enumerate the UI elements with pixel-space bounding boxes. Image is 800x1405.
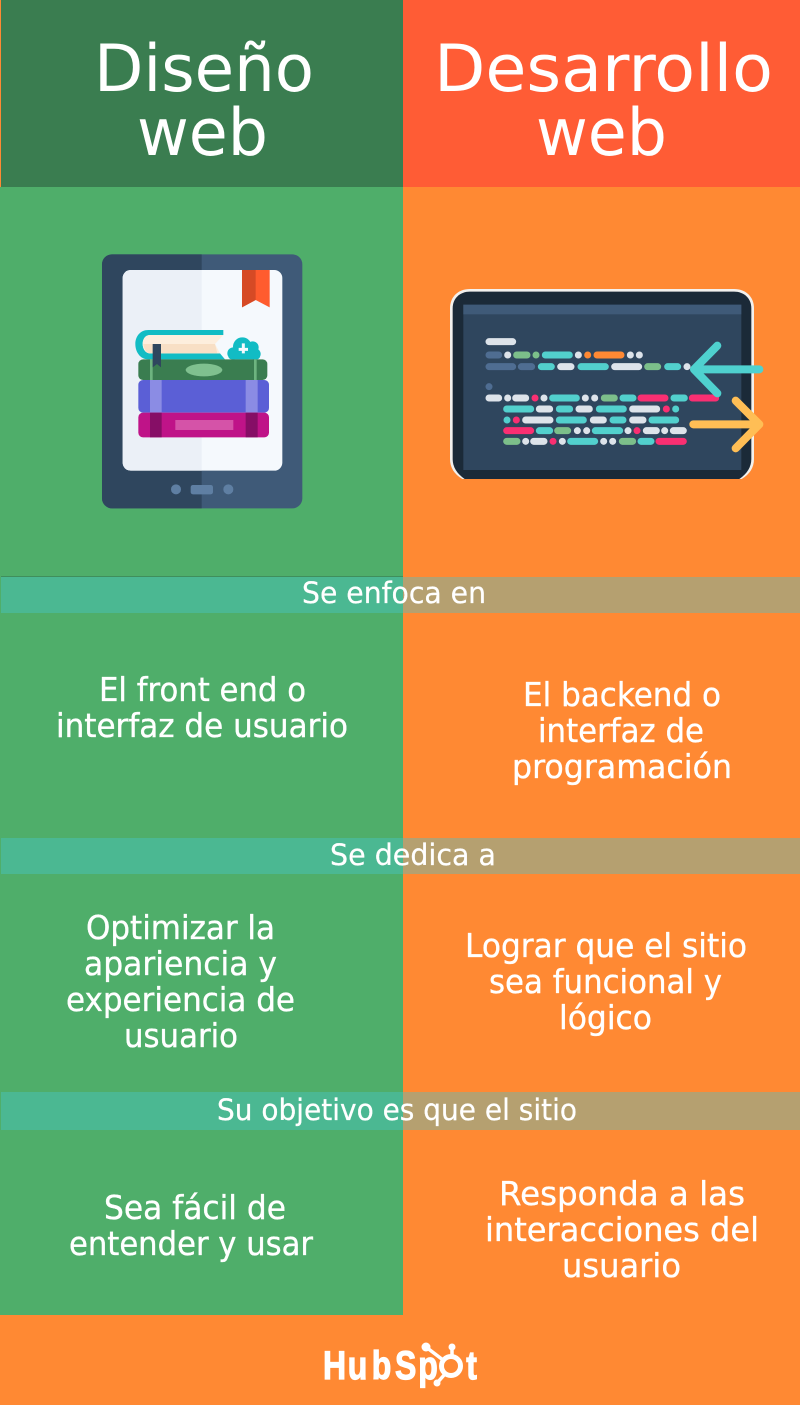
section bar: Se dedica a: Se dedica a xyxy=(330,838,496,872)
section bar: Se dedica a xyxy=(1,838,800,874)
panel: design column xyxy=(0,187,403,1315)
text block: development objective: interacciones del xyxy=(485,1211,759,1249)
text block: development dedication: lógico xyxy=(559,999,652,1037)
logo: HubSpot: HubSpot xyxy=(323,1343,477,1388)
arrow: yellow right xyxy=(693,401,759,448)
text block: development focus: interfaz de xyxy=(538,712,704,750)
text block: development focus: programación xyxy=(512,748,732,786)
text block: design dedication xyxy=(66,909,295,1055)
text block: design objective: entender y usar xyxy=(69,1225,314,1263)
section bar: Se enfoca en: Se enfoca en xyxy=(302,576,486,610)
text block: development focus: El backend o xyxy=(523,676,721,714)
text block: development dedication: sea funcional y xyxy=(489,963,722,1001)
text block: development dedication xyxy=(465,927,747,1037)
panel: design header xyxy=(1,0,403,187)
heading: Desarrollo web: Desarrollo xyxy=(434,32,773,107)
text block: design dedication: Optimizar la xyxy=(86,909,275,947)
text block: design objective: Sea fácil de xyxy=(104,1189,286,1227)
section bar: Su objetivo es que el sitio: Su objetivo es que el sitio xyxy=(217,1093,577,1127)
panel: development header xyxy=(403,0,800,187)
divider: line above first bar xyxy=(1,576,403,577)
text block: development objective: usuario xyxy=(562,1247,681,1285)
text block: design dedication: experiencia de xyxy=(66,981,295,1019)
text block: development objective xyxy=(485,1175,759,1285)
heading: Diseño web xyxy=(94,32,314,171)
heading: Desarrollo web xyxy=(434,32,773,171)
text block: design focus xyxy=(56,671,348,745)
icon: tablet with books xyxy=(102,254,302,508)
text block: development dedication: Lograr que el sitio xyxy=(465,927,747,965)
text block: design focus: interfaz de usuario xyxy=(56,707,348,745)
section bar: Su objetivo es que el sitio xyxy=(1,1092,800,1130)
text block: design dedication: usuario xyxy=(124,1017,238,1055)
text block: development objective: Responda a las xyxy=(499,1175,745,1213)
text block: design dedication: apariencia y xyxy=(84,945,277,983)
text block: design objective xyxy=(69,1189,314,1263)
text block: design focus: El front end o xyxy=(99,671,306,709)
text block: development focus xyxy=(512,676,732,786)
arrow: teal left xyxy=(694,346,759,393)
heading: Diseño web: Diseño xyxy=(94,32,314,107)
icon: HubSpot sprocket xyxy=(422,1342,460,1386)
icon: code screen with arrows xyxy=(450,289,759,479)
heading: Desarrollo web: web xyxy=(536,96,667,171)
heading: Diseño web: web xyxy=(137,96,268,171)
section bar: Se enfoca en xyxy=(1,576,800,613)
